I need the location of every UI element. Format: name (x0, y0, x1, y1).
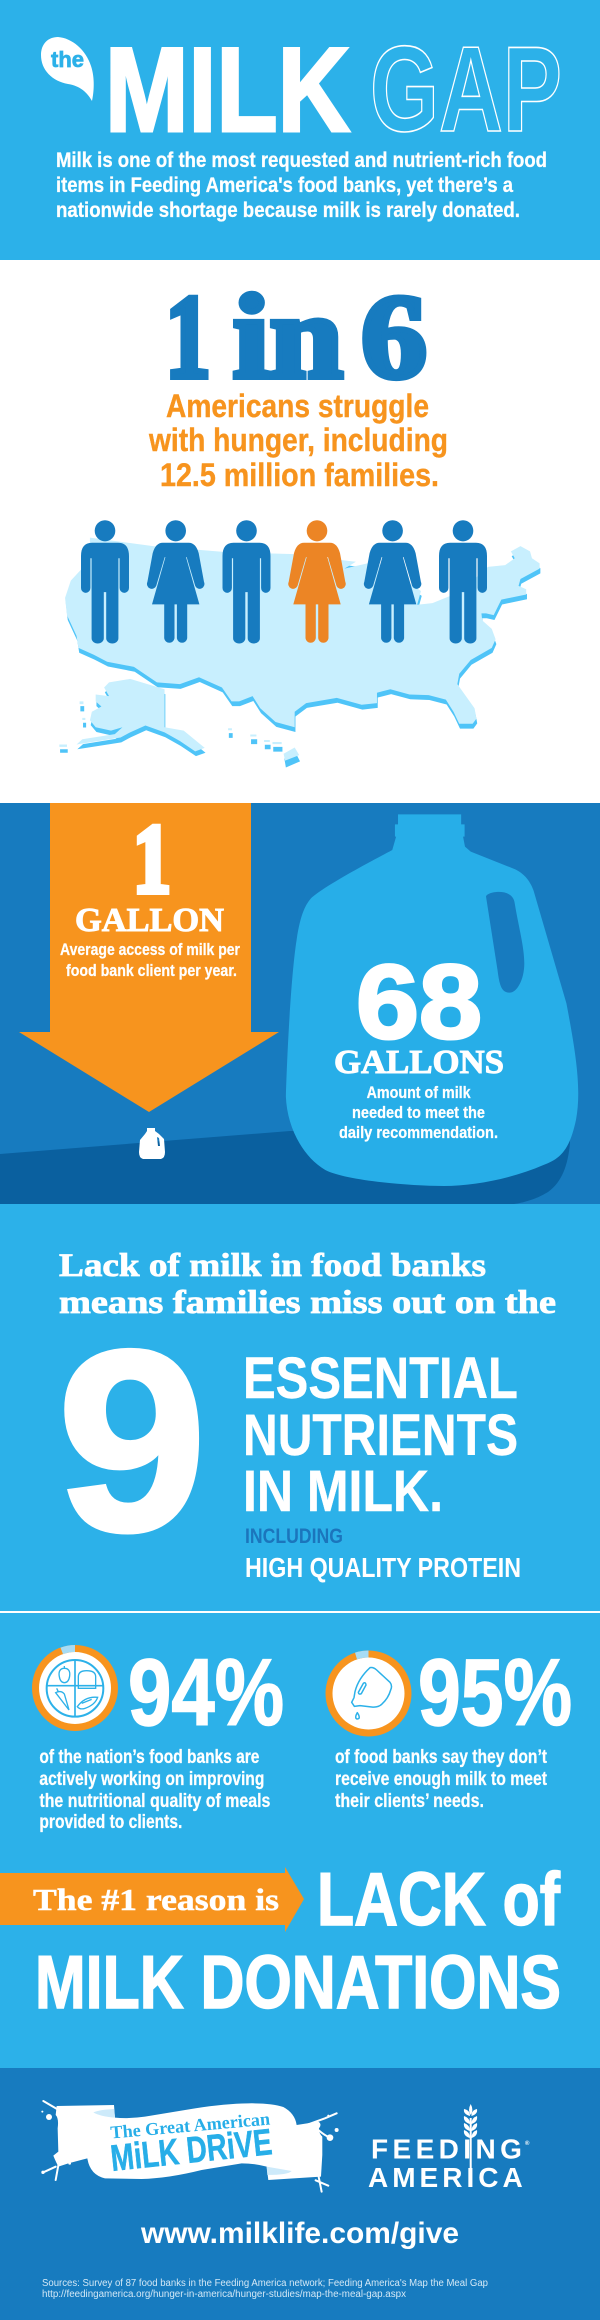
logo: Feeding America: AMERICA (368, 2162, 527, 2193)
subheading: hunger statement (148, 388, 448, 493)
subheading: hunger statement: with hunger, including (148, 422, 448, 458)
caption: 95 percent: receive enough milk to meet (335, 1769, 548, 1790)
icon: the speech bubble (41, 37, 94, 101)
text: including: INCLUDING (245, 1525, 343, 1548)
heading: 1 in 6: in (233, 270, 343, 403)
floor shadow (0, 1125, 570, 1205)
logo: Feeding America (368, 2104, 530, 2193)
arrow: number one reason: The #1 reason is (33, 1882, 279, 1917)
caption: average access: food bank client per year. (66, 962, 237, 980)
caption: amount of milk: Amount of milk (367, 1084, 471, 1102)
caption: average access: Average access of milk per (60, 941, 240, 959)
caption: 94 percent: the nutritional quality of meals (39, 1791, 270, 1812)
heading: 1 in 6 (165, 270, 427, 403)
heading: 1 in 6: 6 (361, 270, 427, 403)
caption: average access (60, 941, 240, 980)
subheading: hunger statement: 12.5 million families. (160, 457, 439, 493)
number: 9: 9 (57, 1296, 207, 1585)
title: MILK GAP (105, 21, 562, 157)
website url: www.milklife.com/give (140, 2217, 459, 2250)
caption: 94 percent: actively working on improving (39, 1769, 264, 1790)
person 4 highlighted (288, 520, 346, 643)
text: essential nutrients: ESSENTIAL (243, 1346, 518, 1411)
person 5 (364, 520, 421, 643)
logo: Feeding America: FEEDING (371, 2134, 526, 2164)
logo: Feeding America: ® (525, 2140, 530, 2147)
caption: amount of milk: daily recommendation. (339, 1124, 498, 1142)
caption: 95 percent: of food banks say they don’t (335, 1747, 548, 1768)
arrow: number one reason (0, 1867, 304, 1932)
caption: 94 percent: provided to clients. (39, 1812, 182, 1833)
intro text (56, 148, 547, 222)
number: 94%: 94% (128, 1640, 284, 1746)
panel: header (0, 0, 600, 260)
arrow: 1 gallon (19, 803, 279, 1112)
heading: lack of milk: Lack of milk in food banks (59, 1248, 486, 1284)
panel: 1 in 6 (0, 260, 600, 803)
text: essential nutrients: NUTRIENTS (243, 1403, 518, 1468)
text: essential nutrients: IN MILK. (243, 1459, 443, 1524)
icon: plate (32, 1645, 118, 1731)
logo text: MiLK DRiVE (109, 2121, 274, 2179)
stat: 95 percent (326, 1640, 572, 1812)
number: 1: 1 (133, 805, 171, 914)
caption: 94 percent (39, 1747, 270, 1833)
person 2 (147, 520, 204, 643)
icon: the speech bubble: the (51, 47, 84, 72)
caption: amount of milk (339, 1084, 498, 1142)
icon: small milk jug (139, 1128, 165, 1159)
text: high quality protein: HIGH QUALITY PROTEIN (245, 1552, 521, 1583)
stat: 94 percent (32, 1640, 284, 1833)
panel: stats (0, 1204, 600, 2068)
label: gallons: GALLONS (334, 1044, 504, 1081)
sources (42, 2278, 488, 2300)
intro text: nationwide shortage because milk is rarely donated. (56, 198, 520, 222)
icon: tipped jug (326, 1650, 412, 1736)
person 1 (81, 520, 129, 644)
text: essential nutrients (243, 1346, 518, 1524)
title: MILK GAP: MILK (105, 23, 350, 157)
caption: 94 percent: of the nation’s food banks are (39, 1747, 259, 1768)
logo text: The Great American (110, 2109, 271, 2142)
heading: 1 in 6: 1 (165, 270, 211, 403)
logo: Great American Milk Drive (41, 2101, 339, 2192)
panel: footer (0, 2068, 600, 2320)
intro text: items in Feeding America's food banks, yet there’s a (56, 173, 514, 197)
map: United States (59, 538, 540, 768)
label: gallon: GALLON (75, 902, 224, 939)
subheading: hunger statement: Americans struggle (166, 388, 429, 424)
sources: http://feedingamerica.org/hunger-in-america/hunger-studies/map-the-meal-gap.aspx (42, 2289, 406, 2300)
caption: amount of milk: needed to meet the (352, 1104, 485, 1122)
panel: gallons comparison (0, 803, 600, 1205)
heading: lack of milk (59, 1248, 556, 1321)
caption: 95 percent: their clients’ needs. (335, 1791, 484, 1812)
heading: lack of milk: means families miss out on the (59, 1285, 556, 1321)
person 6 (439, 520, 487, 644)
icon: large milk jug (286, 814, 578, 1186)
caption: 95 percent (335, 1747, 548, 1812)
person 3 (222, 520, 270, 644)
icon: people row (81, 520, 487, 644)
number: 68: 68 (356, 944, 482, 1061)
sources: Sources: Survey of 87 food banks in the Feeding America network; Feeding America's Map the Meal Gap (42, 2278, 488, 2289)
